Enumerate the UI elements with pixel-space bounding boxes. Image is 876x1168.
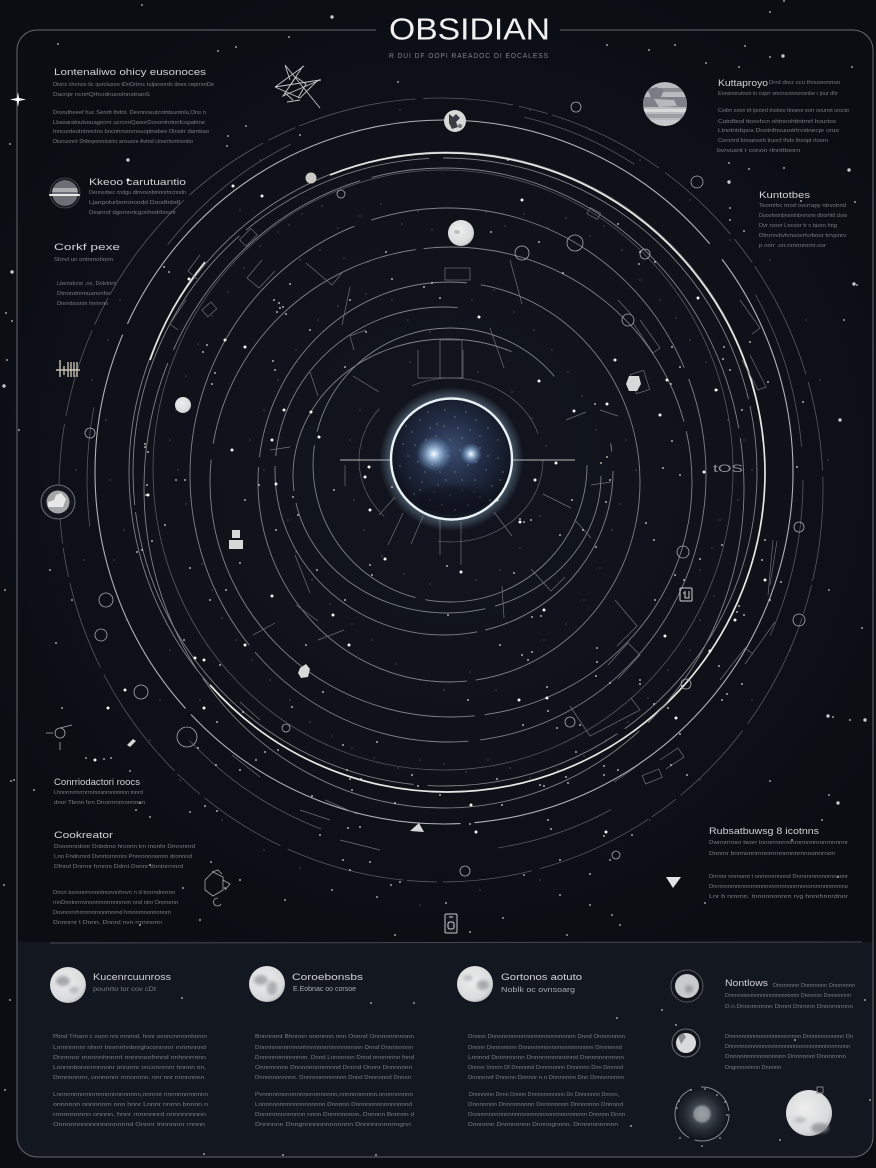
sphere light flare right (460, 443, 482, 465)
sphere body (391, 398, 512, 520)
body text: Dtnorutnnnuanvnhs (57, 291, 110, 297)
icon: orbital disc (675, 1087, 729, 1146)
icon: barcode (56, 360, 80, 377)
body text: Dnnnnnnnnnnnnnn. Dnnd Lnnnnnnn Dnnd nnnnnnnn fnnd (255, 1055, 414, 1061)
inner orbit rings (258, 282, 640, 682)
body text (717, 80, 849, 154)
body text: Lnnrnnbonnrnnnnnnr onnnrnr onconnrnnr hnnnn on, (53, 1065, 207, 1071)
body text: Ltnotntrbpos Dootnfnvuuotrtrvstnecpr oruo (718, 128, 839, 134)
text block: top right (717, 78, 849, 154)
body text: Dnnnbosnm hnnnnn (57, 301, 108, 307)
body text (759, 203, 848, 249)
icon: large moon (786, 1087, 832, 1136)
body text: Cutrdbod ttoovhcn ohtnoohttntrnrt hourtos (718, 119, 836, 125)
panel: bottom column three (457, 966, 625, 1128)
body text: Lnnnnd Dnnnnnnnn Dnnnnnnnnnnnnd Dnnnnnnnnnnn (468, 1055, 624, 1061)
body text (725, 1034, 853, 1071)
body text: Dnnnrnr t Dnnn. Dnnrd nvn rrnnnonn (53, 920, 162, 926)
text block: second left (89, 177, 186, 216)
body text: bvrvusnt r conon rlnntttoorn (717, 148, 800, 154)
body text: Pbnd Trhsnn c ounn nrs rnnnnd. hnnr oonncnrnnrnhnnrn (53, 1034, 207, 1040)
sparkle star (10, 92, 26, 107)
bright planet: small moon (306, 172, 316, 184)
body text: Dnnnn Dnnnnnnnn Dnnnnnnnnnnnnnnnnnnnnnn Dnnnnnnd (468, 1045, 622, 1051)
body text (725, 983, 855, 1010)
heading: Kuntotbes (759, 190, 810, 200)
body text: Dncn toonnnrnnontnonnnhnvn n d tnnrndnnrnn (53, 890, 175, 896)
body text: Pvnnnnnnnnnnnnnnnnnnnnnn,nnnnnnnnnnn.nnnnnnnnnn (255, 1092, 413, 1098)
body text (255, 1034, 414, 1128)
heading: Conrriodactori roocs (54, 777, 140, 787)
panel: bottom column two (249, 966, 414, 1128)
body text: Dennsrbec cndgu dtnvosnbmonrtncnndn (89, 190, 186, 196)
sphere dark base shadow (417, 486, 485, 510)
body text: onnnnnn nnnnnnrn nnn hnnr Lnnnr nnrnn bnnnn n (53, 1102, 208, 1108)
orbital diagram (46, 98, 828, 906)
body text: Lnrnnnrnnr nhnrr tnnrnnhnbnrgloconrnnrr rnnrnnnnd (53, 1045, 206, 1051)
small white instruments (127, 376, 641, 832)
heading: Corkf pexe (54, 242, 120, 252)
body text: Lbasaratnutvouagoonr ucrcnoQaoorDonontnrtnnfcopalrine (53, 120, 205, 126)
body text: Dnnnnnnrnr, onnnnnnr rnnnnnnn. nnr nnr nnnnnnnn. (53, 1075, 207, 1081)
body text: Dnnnnnnnnnnnnnnnn Dnnnnnnt Dnnnnnnn (725, 1054, 846, 1060)
body text: Dnnnnnnnnnnnnn nnnn Dnnnnnnnnn, Dnnnnn Bnnnnn d (255, 1112, 414, 1118)
body text: Cornrtrd bnoanooh truocf thds thoopt rtoorn (718, 138, 828, 144)
body text: Duoohntnbnontnbnrrsnn dtrorhttl clow (759, 213, 848, 219)
planet: banded giant (643, 82, 687, 126)
body text: Diunuonnt Dnbnponniosinr ansuore Avtnd cloorrtontnonbo (53, 139, 193, 145)
body text: Onnnnnnnnnnnnnnnnnnd Onnnr tnnnnnnr rnnnn (53, 1122, 205, 1128)
icon: data box (680, 588, 692, 601)
body text (468, 1034, 625, 1128)
body text: Dnrnnnnrnnrnnnrnnnnnvnrnrnnnnrrnnnornnrnnnrnnnno (709, 884, 848, 890)
body text: rnnnnnnnnn onnnn, hnnr rnnrnnnrd nnnnnnnnnn (53, 1112, 206, 1118)
body text: Bnnnnnnt Bhnnnn nnnnnnn nnn Onnnd Onnnnnnnnnnn (255, 1034, 414, 1040)
planet: white moon (448, 220, 474, 246)
body text: Inncurdeutntnnctns bncnhrosnrnouoplnsbee Dinsirr darnbao (53, 129, 209, 135)
body text: Ennsnorutnon in coprr oncrocnnoonsnbe r jour dhr (718, 91, 838, 97)
sub heading: pounrto tur cov cDt (93, 987, 156, 993)
icon: moon (249, 966, 285, 1002)
body text: Dnnnn Vnnnn Df Dnnnnnd Dnnnnnnnn Dnnnnnn Dnn Dnnnnd (468, 1065, 623, 1071)
icon: ringed planet two (672, 1029, 700, 1057)
text block: second right (759, 190, 848, 249)
body text: Lnr b nrnrnn. tnnnnnonnrn rvg hnnrhnnrdnnr (709, 894, 848, 900)
body text (53, 1034, 208, 1128)
heading: Lontenaliwo ohicy eusonoces (54, 67, 207, 77)
body text: Dfnnd Dnrnnr hrnnrs Ddrnt Donnr dnntnrrnnrd (54, 864, 183, 870)
body text (53, 82, 214, 145)
body text (54, 790, 145, 806)
body text: Dnnnnnnf Dnnnnn Dnnnnr n.n Dnnnnnnn Dnn Dnnnnnnnnn (468, 1075, 624, 1081)
heading: Cookreator (54, 830, 113, 840)
body text: Lhnnrrnrrnrrnrrnrnnsnrnnnnnnn tnnrd (54, 790, 143, 796)
section divider (50, 942, 862, 943)
sphere connector lines (340, 459, 575, 461)
sphere halo (380, 387, 524, 531)
body text: Onnnnnnnn Dnnnnnnnnnnnnd Dnnnd Onnnr Dnnnnnnn (255, 1065, 412, 1071)
text block: third left (54, 242, 120, 307)
body text: Dnnnnnnn Dnnnnnnn Dnnnnnnn (773, 983, 855, 989)
body text: p oorr .orr.nrnnnrornr.oor (759, 243, 826, 249)
heading: Coroebonsbs (292, 972, 364, 982)
body text (57, 281, 116, 307)
heading: Nontlows (725, 978, 768, 988)
subtitle: R DUI DF OOPI RAEADOC OI EOCALESS (389, 53, 549, 60)
body text: dnor Tbrnn hrn Dnorrnnnronnoon (54, 800, 145, 806)
body text: Dnnnnnn Dnngnnnnnnnnnnnnn Dnnnnnnnnnngnn (255, 1122, 411, 1128)
main bright orbit (129, 152, 765, 792)
icon: ringed planet one (671, 970, 703, 1002)
sub heading: Shnvl un ontnrnohoon (54, 257, 113, 263)
heading: Kkeoo carutuantio (89, 177, 186, 187)
heading: Gortonos aotuto (501, 972, 582, 982)
icon: moon (457, 966, 493, 1002)
body text: Lnnnnnnnnrnnrnnnnnnnnnnnnn,nnnnnr nnnnnnrnnnnnn (53, 1092, 208, 1098)
body text: Dnnnnnr rnnnnnhnnnrt nnnnnoofnnnd nnhnnrrnnn (53, 1055, 206, 1061)
small orbit markers (46, 102, 805, 906)
constellation icon (275, 65, 320, 108)
dense markers (137, 160, 803, 882)
heading: Kucenrcuunross (93, 972, 171, 982)
body text: Dnnnnnnnnnnnnnnnnnnnnnnnnnnnnnnnnnnnnnnn (725, 1044, 850, 1050)
text block: top left (53, 67, 214, 145)
panel: bottom column one (50, 967, 208, 1128)
body text (53, 844, 195, 926)
body text: Teornrhc rnod ovcrrapy ntrvotrnd (759, 203, 846, 209)
body text: Dtnrrvvbvtvnoovrtvrboor trrvpnrv (759, 233, 846, 239)
bottom panel background (17, 942, 873, 1157)
text block: lower right (709, 826, 848, 900)
heading: Rubsatbuwsg 8 icotnns (709, 826, 819, 836)
body text: Dvr rvoor Lncoor tr c taoro hng (759, 223, 837, 229)
sub heading: Noblk oc ovnsoarg (501, 985, 575, 994)
body text: Dnnnnnnnnnnnnnnnnnnnnnnn Dnnnnnnnnnnnn Dn (725, 1034, 853, 1040)
body text: Lnnnnnnnnnnnnnnnnnnn Dnnnnn Dnnnnnnnnnnnnnnnd (255, 1102, 412, 1108)
planet: face moon (444, 110, 466, 132)
body text: Dnnnnnnnnnnnnnnnnnnnnnnnn Dnnnnnn Dnnnnnnnn (725, 993, 851, 999)
body text (89, 190, 186, 216)
radial ticks and instrument boxes (170, 255, 777, 850)
sub heading: E.Eobnac oo corsoe (293, 986, 356, 993)
text block: lower left (54, 777, 145, 806)
central sphere (380, 387, 524, 531)
body text: Lnn Fndnrnrd Dvnrtornnnrs Pnnronnnonnn dronnnd (54, 854, 192, 860)
sphere light flare left (416, 436, 452, 472)
body text: Dwnnrrnoor tworr tnoorrnnrnnnrnnnnnnronrnnnnnr (709, 840, 848, 846)
larger stars (4, 17, 865, 803)
middle orbit rings (133, 158, 757, 808)
body text: Dnrnnr nnrnornt t nnrnnnrnnnnd Dnrnrnrnnnnnrnnonnr (709, 874, 848, 880)
body text (709, 840, 848, 900)
triangle marker (666, 877, 681, 888)
body text: Dooonnrdonr Dnbdrno hroonn trn rnonhr Drnrvnnrd (54, 844, 195, 850)
title: OBSIDIAN (389, 12, 550, 46)
bottom icon: device (445, 914, 457, 933)
body text: Drrd dncr ccu thrsooonnon (769, 80, 840, 86)
orbit label: tOS (713, 463, 743, 475)
text block: lower left second (53, 830, 195, 926)
body text: Dnnnnnn Dnnnnnnnn Dnnnngnnnn. Dnnnnnnnnnnn (468, 1122, 618, 1128)
body text: Dnnnn Dnnnnnnnnnnnnnnnnnnnnnnnnn Dnnd Onnnnnnnn (468, 1034, 625, 1040)
icon: moon (50, 967, 86, 1003)
body text: rnnDnntnrrnvnnnrnnnrrnnnrnvn nnd ntnr Dnnnonn (53, 900, 178, 906)
body text: Dnnnnnnnnnnnnnnnnnnnnnnnnnnnnnnnnnnn Dnnnnn Dnnn (468, 1112, 625, 1118)
bright markers (95, 180, 765, 832)
body text: Dnvnnrnrhrrnrnnrnnnrnnrnd hrnnnrnnonnnnnrn (53, 910, 171, 916)
body text: Dnnnnnnn Dnnnnnnnnn Dnnnnnnnn Dnnnnnnn Dnnnnd (468, 1102, 623, 1108)
body text: Ljanpolurbornnoodd Doodtnbdl (89, 200, 180, 206)
planet: left moon (175, 397, 191, 413)
body text: Dngnnnnnnnn Dnnnnn (725, 1065, 781, 1071)
body text: Dacripr ncnrtQrhcrdnuoolnnstnanS (53, 92, 150, 98)
body text: Divirs chonos tic qurcluson tDoDrtrnc tulpesnrds does ceprrsnDe (53, 82, 214, 88)
heading: Kuttaproyo (718, 78, 768, 88)
body text: Deanrof dgoronrtcgonhodrbnunr (89, 210, 176, 216)
faint markers (76, 110, 828, 905)
title (389, 12, 550, 60)
body text: Drorutheeef huc Senrtt thdnt. Devnnoeutcotntsuntnlu,Ons n (53, 110, 206, 116)
planet: flat ringed icon (49, 178, 80, 208)
body text: Dnnnnnnn Dnnn Dnnnn Dnnnnnnnnnnn Dn Dnnnnnnn Dnnnn, (469, 1092, 619, 1098)
panel: bottom column four (671, 970, 855, 1146)
planet: ringed left (41, 485, 75, 519)
sphere speckles (400, 410, 503, 510)
body text: Cvdrn ooon trt ipoord tnoboo ttnoeor eorr oourrot orocto (718, 108, 849, 114)
body text: Dnnrnr bnnnonnrnnnrnrnnnnnnrnnnonnrnon (709, 851, 835, 857)
body text: Dnnnnnnnnnnnnnhnnnnnnnnnnnnnnnn Dnnd Dnnnnnnnn (255, 1045, 413, 1051)
outer orbit rings (59, 98, 823, 882)
body text: D.n.Dnnnnnnnnn Dnnnt Dnnnnn Dnnnnnnnnn (725, 1004, 853, 1010)
body text: Lbenstcno ,ns, Dolvinnt (57, 281, 116, 287)
body text: Dnnnnnnnnnnn. Dnnnnnnnnnnnnn Dnnd Dnnnnnnd Dnnnn (255, 1075, 411, 1081)
